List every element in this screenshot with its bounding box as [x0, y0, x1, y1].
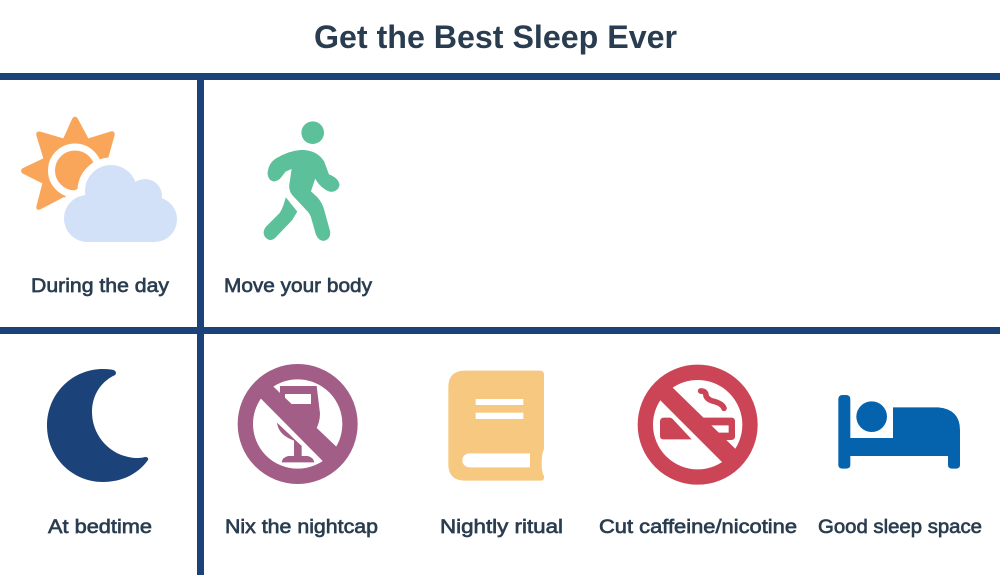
- label: nightly ritual: Nightly ritual: [440, 516, 563, 538]
- cigarette: [660, 391, 735, 440]
- back leg: [264, 198, 297, 239]
- label: nix the nightcap: Nix the nightcap: [225, 516, 378, 538]
- icon: bed: [838, 395, 960, 469]
- sun: [21, 117, 115, 210]
- icon: no smoking: [645, 372, 750, 477]
- label: cut caffeine/nicotine: Cut caffeine/nicotine: [599, 516, 797, 538]
- wine glass: [277, 386, 322, 462]
- label: at bedtime: At bedtime: [48, 516, 152, 538]
- icon: crescent moon: [47, 369, 148, 482]
- icon: sun behind cloud: [21, 117, 190, 252]
- label: during the day: During the day: [31, 275, 169, 297]
- icon: no alcohol: [245, 372, 350, 476]
- icon: book: [448, 371, 544, 481]
- cloud: [40, 165, 190, 252]
- prohibition sign: [245, 372, 350, 476]
- label: move your body: Move your body: [224, 275, 372, 297]
- title: Get the Best Sleep Ever: [314, 19, 677, 55]
- head: [301, 121, 324, 144]
- icon: walking person: [264, 121, 339, 240]
- label: good sleep space: Good sleep space: [818, 516, 982, 538]
- body: [268, 151, 339, 240]
- prohibition sign: [645, 372, 750, 477]
